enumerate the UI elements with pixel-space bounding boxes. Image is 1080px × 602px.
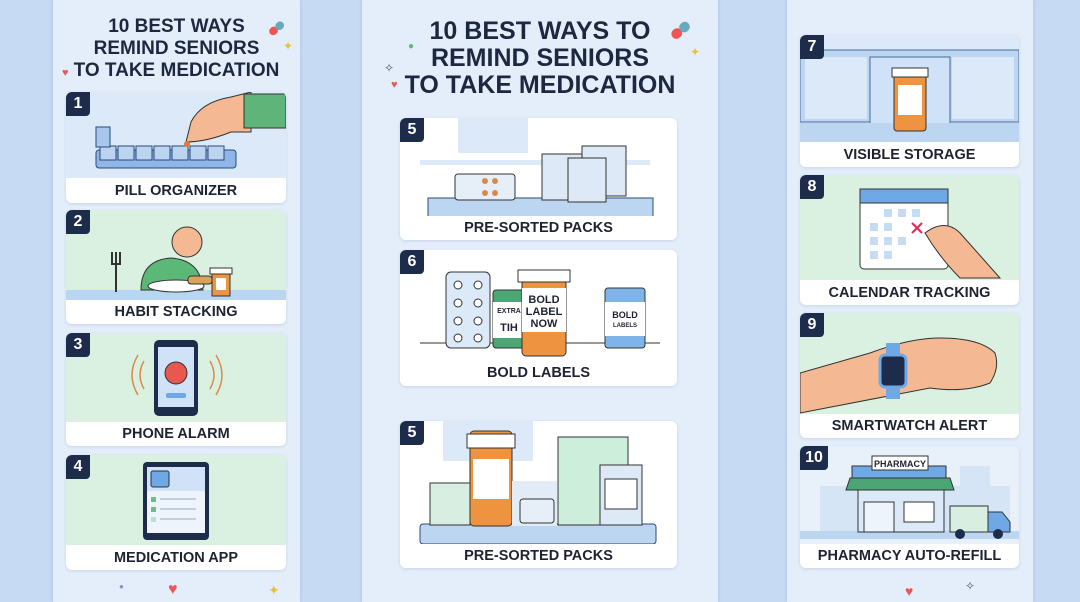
title: left: TO TAKE MEDICATION	[74, 60, 279, 81]
card 6: bold labels: TIH	[500, 322, 518, 334]
badge 1	[66, 92, 90, 116]
badge 5b: 5	[408, 424, 416, 441]
badge 8	[800, 175, 824, 199]
label: HABIT STACKING	[114, 304, 237, 320]
label	[800, 414, 1019, 438]
label: PRE-SORTED PACKS	[464, 220, 613, 236]
title: left: 10 BEST WAYS	[108, 16, 245, 37]
badge 9: 9	[808, 316, 816, 333]
badge 9	[800, 313, 824, 337]
card 6: bold labels	[400, 250, 677, 386]
label	[66, 545, 286, 570]
icon: capsule left	[269, 21, 284, 36]
card 7: visible storage	[800, 35, 1019, 167]
label	[66, 422, 286, 446]
badge 3: 3	[74, 336, 82, 353]
card 6: bold labels: NOW	[531, 318, 558, 330]
label	[800, 280, 1019, 305]
panel: middle	[362, 0, 718, 602]
label: BOLD LABELS	[487, 365, 590, 381]
panel: left	[53, 0, 300, 602]
label	[400, 216, 677, 240]
card 3: phone alarm	[66, 333, 286, 446]
label	[400, 544, 677, 568]
badge 7: 7	[808, 38, 816, 55]
label	[66, 178, 286, 203]
badge 10: 10	[805, 449, 823, 466]
card 10: pharmacy auto-refill: PHARMACY	[874, 459, 926, 469]
badge 6	[400, 250, 424, 274]
card 6: bold labels: BOLD	[528, 294, 560, 306]
text: ✧	[384, 61, 394, 75]
card 5: pre-sorted packs	[400, 118, 677, 240]
badge 7	[800, 35, 824, 59]
label: PRE-SORTED PACKS	[464, 548, 613, 564]
card 6: bold labels: EXTRA	[497, 308, 521, 315]
label	[400, 360, 677, 386]
title: middle: TO TAKE MEDICATION	[405, 71, 675, 99]
card 10: pharmacy auto-refill	[800, 446, 1019, 568]
label: PHONE ALARM	[122, 426, 230, 442]
card 6: bold labels: LABELS	[613, 323, 637, 329]
badge 2: 2	[74, 213, 82, 230]
card 4: medication app	[66, 455, 286, 570]
label	[66, 300, 286, 324]
badge 6: 6	[408, 253, 416, 270]
label: CALENDAR TRACKING	[829, 284, 990, 300]
text: ✦	[690, 45, 700, 59]
text: ●	[408, 41, 414, 52]
label	[800, 142, 1019, 167]
card 1: pill organizer	[66, 92, 286, 203]
label: MEDICATION APP	[114, 550, 238, 566]
label: PILL ORGANIZER	[115, 182, 237, 198]
card 8: calendar tracking	[800, 175, 1019, 305]
text: ♥	[391, 79, 398, 91]
card 5b: pre-sorted packs	[400, 421, 677, 568]
icon: dots left: ●	[119, 582, 124, 591]
badge 10	[800, 446, 828, 470]
icon: sparkle right: ✧	[965, 579, 975, 593]
icon: sparkle left: ✦	[268, 582, 280, 598]
text: ♥	[62, 67, 69, 79]
badge 4: 4	[74, 458, 82, 475]
badge 8: 8	[808, 178, 816, 195]
card 6: bold labels: BOLD	[612, 310, 638, 320]
card 6: bold labels: LABEL	[526, 306, 563, 318]
badge 5	[400, 118, 424, 142]
badge 3	[66, 333, 90, 357]
icon: heart left: ♥	[168, 581, 178, 598]
icon: heart right: ♥	[905, 583, 913, 599]
title: left	[74, 16, 279, 81]
badge 5b	[400, 421, 424, 445]
title: middle: REMIND SENIORS	[431, 44, 649, 72]
title: left: REMIND SENIORS	[94, 38, 259, 59]
title: middle	[404, 17, 675, 99]
card 9: smartwatch alert	[800, 313, 1019, 438]
label: VISIBLE STORAGE	[844, 146, 975, 162]
panel: right	[787, 0, 1033, 602]
card 2: habit stacking	[66, 210, 286, 324]
icon: capsule middle	[671, 22, 690, 39]
label: SMARTWATCH ALERT	[832, 418, 987, 434]
badge 2	[66, 210, 90, 234]
badge 5: 5	[408, 121, 416, 138]
label	[800, 544, 1019, 568]
title: middle: 10 BEST WAYS TO	[430, 17, 650, 45]
label: PHARMACY AUTO-REFILL	[818, 548, 1001, 564]
badge 4	[66, 455, 90, 479]
icon: sparkles: ✦	[283, 39, 293, 53]
badge 1: 1	[74, 95, 82, 112]
